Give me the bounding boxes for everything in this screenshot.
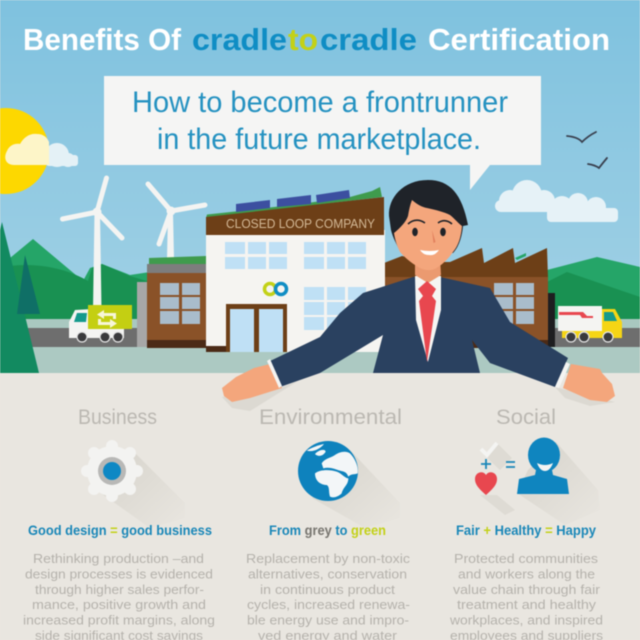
lower panel background [0,373,640,640]
right hand [563,364,615,402]
logo on building [264,284,286,294]
social body text: value chain through fair [453,582,601,597]
nose [432,230,436,243]
smile [420,250,439,255]
speech bubble [104,76,541,190]
social body text: Protected communities [454,551,599,566]
title: cradle [192,22,287,57]
mountains left [10,239,150,330]
wind turbine 2 [148,184,205,259]
title: Benefits Of [23,22,182,57]
plus [481,459,491,469]
environmental heading: Environmental [259,406,402,429]
left small building [137,256,206,348]
person [517,438,569,494]
shirt collar [415,276,441,362]
icon: globe [298,441,400,528]
icon: gear [87,446,185,528]
title: Certification [428,22,610,57]
icon: birds [567,132,607,168]
title: cradle [320,22,417,57]
building sign text: CLOSED LOOP COMPANY [226,216,375,231]
face [394,200,462,270]
heart [475,472,497,495]
truck left [69,305,132,342]
main building [206,187,385,352]
neck [415,258,441,283]
clouds right [495,180,618,222]
environmental body text: alternatives, conservation [248,566,407,582]
recycle arrows [97,310,117,328]
eyes [412,228,446,236]
environmental body text: Replacement by non-toxic [246,551,411,566]
speech bubble text: How to become a frontrunner [132,86,508,119]
wind turbine 1 [62,178,122,310]
tree large [0,222,39,373]
column: business [23,406,219,640]
environmental body text: ble energy use and impro- [247,612,409,628]
eyebrows [408,220,452,224]
check mark [481,443,497,455]
tree small [17,255,40,314]
business body text: through higher sales perfor- [35,582,204,597]
title: to [288,22,318,57]
mountains right [547,257,640,322]
speech bubble text: in the future marketplace. [157,123,481,156]
social body text: treatment and healthy [457,597,597,612]
environmental subheading: From grey to green [269,523,386,538]
hair back [389,180,468,253]
column: environmental [246,406,414,640]
column: social [449,406,607,640]
road and ground [0,319,640,374]
factory right [384,248,555,348]
cuffs [267,359,570,388]
left hand [222,364,282,402]
environmental body text: in continuous product [260,582,395,597]
environmental body text: cycles, increased renewa- [247,597,410,612]
social body text: workplaces, and inspired [449,612,603,628]
business body text: increased profit margins, along [23,612,215,628]
social heading: Social [496,406,556,429]
social body text: and workers along the [458,566,595,582]
truck right [558,306,622,342]
business body text: mance, positive growth and [32,597,206,612]
equals [506,462,515,467]
icon: fair plus healthy equals happy [475,438,600,525]
suit [268,277,568,387]
sky background [0,0,640,375]
business body text: Rethinking production –and [33,551,204,566]
hand shadows [222,381,615,411]
business heading: Business [78,406,157,429]
tie [418,281,436,362]
social subheading: Fair + Healthy = Happy [456,523,596,538]
icon: sun with cloud [0,108,78,194]
business body text: design processes is evidenced [25,566,213,582]
door [226,304,287,352]
business subheading: Good design = good business [28,523,212,538]
man in suit [222,180,615,411]
